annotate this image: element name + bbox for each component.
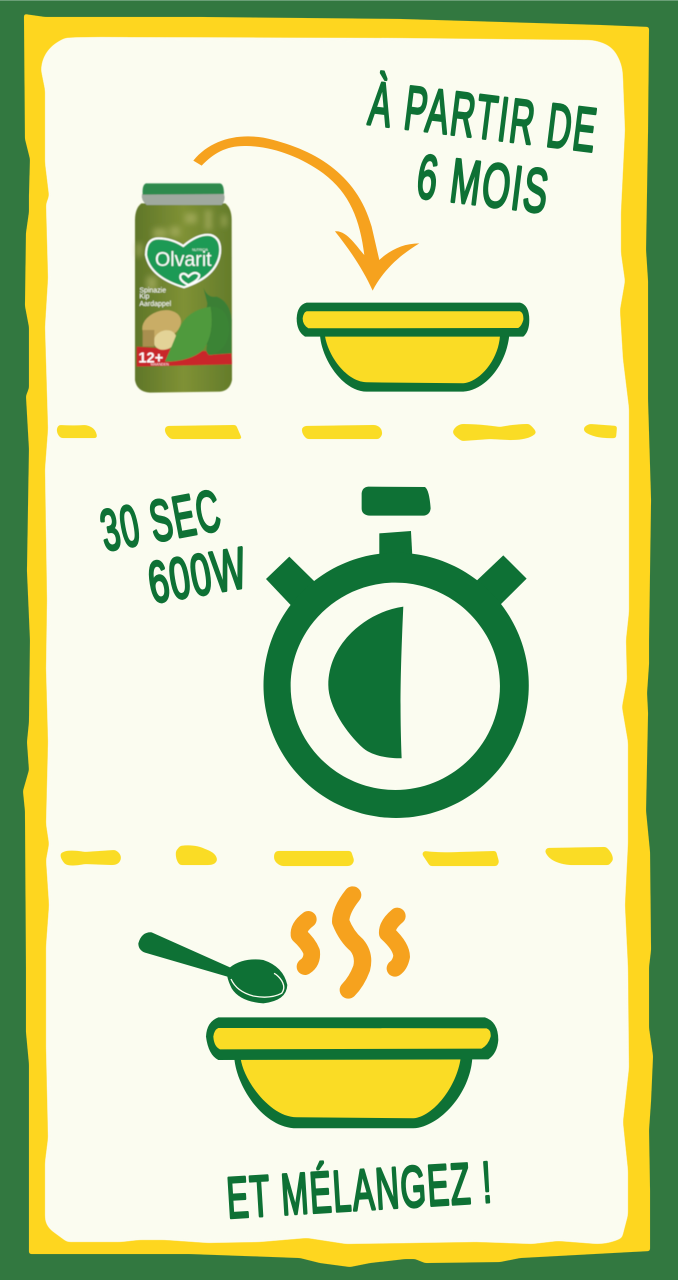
product jar: Olvarit: MAANDEN	[151, 362, 169, 366]
flavour text: Aardappel	[139, 301, 172, 308]
product jar: Olvarit: NUTRICIA	[192, 248, 209, 252]
label: 30 sec 600W: 600W	[143, 536, 251, 616]
half-dial fill	[328, 607, 403, 758]
label: 30 sec 600W	[95, 477, 251, 616]
heading: À partir de 6 mois	[365, 68, 600, 226]
icon: spoon	[138, 932, 287, 1003]
label heart	[146, 235, 220, 287]
stem	[379, 531, 413, 562]
flavour text	[139, 288, 172, 308]
caption: et mélangez: ET MÉLANGEZ !	[225, 1149, 493, 1230]
top button	[362, 487, 431, 516]
ring	[263, 553, 529, 818]
icon: empty bowl	[297, 303, 529, 392]
red band	[137, 347, 232, 367]
flavour text: Kip	[139, 294, 150, 301]
spinach leaves	[203, 287, 232, 355]
icon: stopwatch	[263, 487, 529, 818]
dashed divider: top	[57, 424, 617, 441]
age text: 12+	[138, 351, 163, 367]
jar body	[135, 203, 232, 393]
arrow: jar into bowl	[193, 136, 419, 291]
potato	[138, 305, 185, 345]
right ear	[463, 555, 527, 617]
food chunks	[137, 210, 227, 290]
product jar: Olvarit	[135, 183, 232, 393]
flavour text: Spinazie	[139, 288, 166, 295]
product jar: Olvarit: Olvarit	[155, 249, 212, 271]
heading: À partir de 6 mois: À PARTIR DE	[365, 68, 600, 165]
heading: À partir de 6 mois: 6 MOIS	[413, 141, 552, 226]
left ear	[266, 557, 327, 617]
lid and ring	[142, 194, 225, 205]
icon: steam	[299, 895, 402, 990]
icon: steaming bowl	[206, 1017, 498, 1128]
dashed divider: bottom	[60, 845, 613, 866]
label: 30 sec 600W: 30 SEC	[95, 477, 225, 563]
